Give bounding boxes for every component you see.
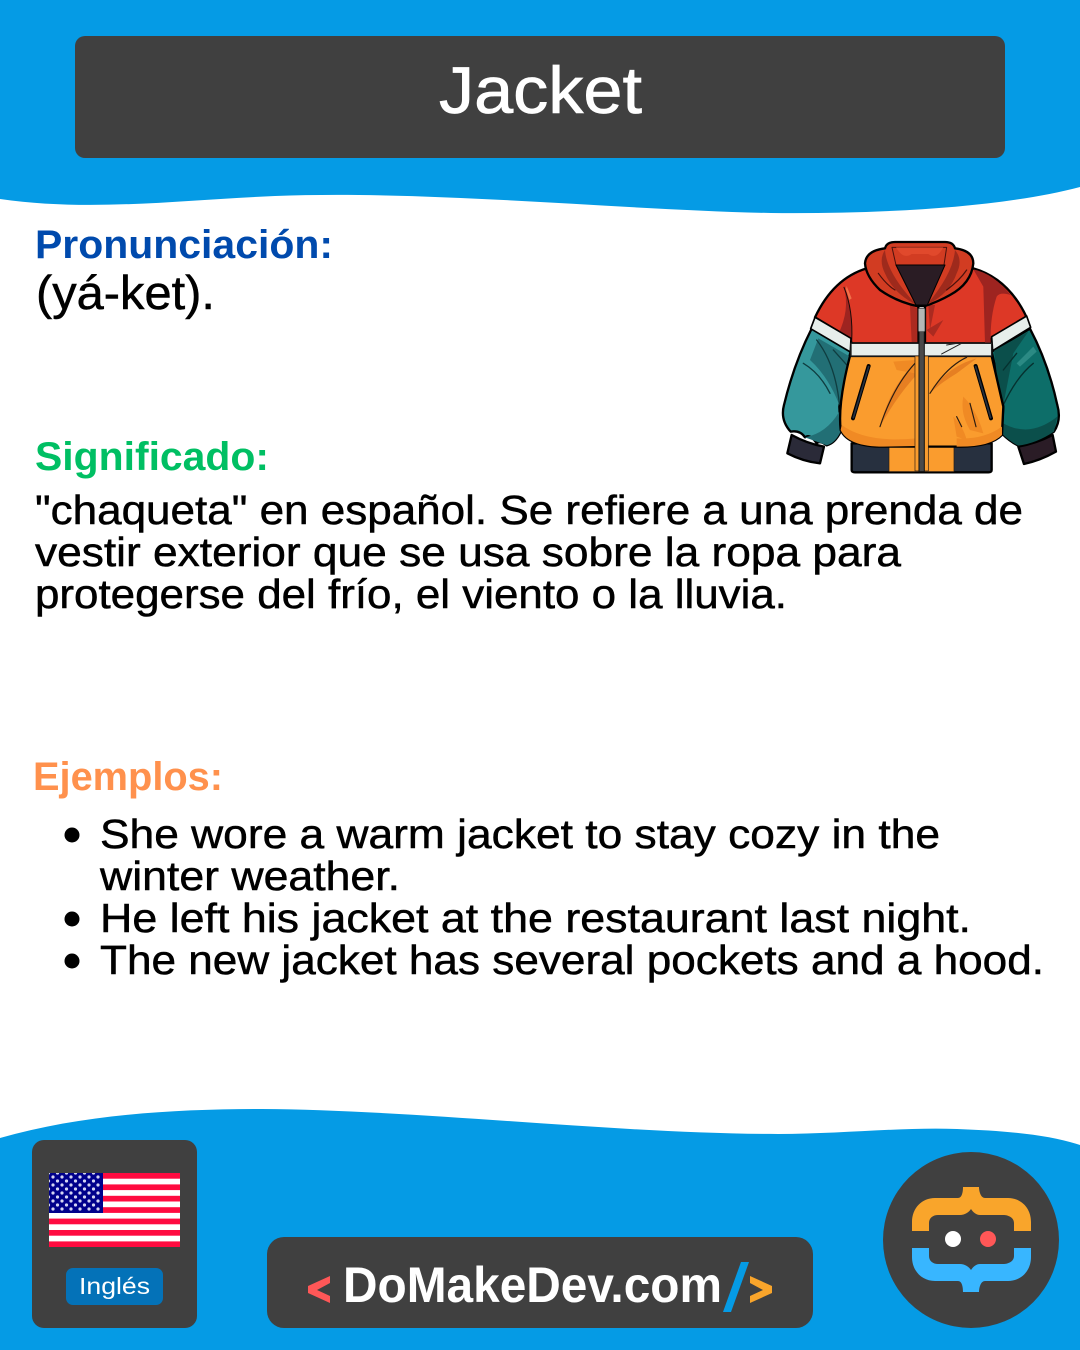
list: examples: The new jacket has several pockets and a hood. — [100, 937, 1044, 983]
hood — [865, 242, 973, 306]
icon: jacket — [783, 242, 1059, 472]
left eye — [945, 1231, 961, 1247]
heading: meaning: Significado: — [35, 435, 269, 479]
right sleeve — [992, 329, 1059, 446]
neck lining — [896, 265, 945, 305]
orange body — [840, 356, 1003, 447]
left cuff — [787, 435, 824, 463]
list: examples: She wore a warm jacket to stay cozy in the — [100, 811, 940, 857]
language badge: Inglés — [79, 1273, 150, 1299]
white bands — [811, 317, 851, 352]
list: examples — [64, 811, 1044, 983]
zipper — [915, 356, 928, 471]
top blue wave band — [0, 0, 1080, 213]
left chevron — [308, 1276, 330, 1303]
bottom brace — [912, 1248, 1031, 1292]
logo: robot badge — [883, 1152, 1059, 1328]
language badge — [66, 1268, 163, 1305]
title panel — [75, 36, 1005, 158]
red yoke — [815, 268, 918, 343]
right chevron — [750, 1276, 772, 1303]
heading: pronunciation: Pronunciación: — [35, 223, 333, 267]
text: meaning: vestir exterior que se usa sobre la ropa para — [35, 529, 901, 575]
title: Jacket — [439, 53, 642, 127]
bottom blue wave band — [0, 1109, 1080, 1350]
list: examples: He left his jacket at the restaurant last night. — [100, 895, 971, 941]
slash — [723, 1262, 749, 1312]
text: meaning — [35, 487, 1023, 617]
website panel — [267, 1237, 813, 1328]
right cuff — [1018, 435, 1056, 464]
right eye — [980, 1231, 996, 1247]
left pocket — [853, 366, 869, 418]
text: meaning: "chaqueta" en español. Se refiere a una prenda de — [35, 487, 1023, 533]
icon: US flag — [49, 1173, 180, 1247]
text: meaning: protegerse del frío, el viento o la lluvia. — [35, 571, 787, 617]
hood inner — [892, 247, 947, 265]
right pocket — [976, 366, 991, 418]
list: examples: winter weather. — [99, 853, 400, 899]
language panel — [32, 1140, 197, 1328]
heading: examples: Ejemplos: — [33, 755, 223, 799]
website name: DoMakeDev.com — [343, 1257, 722, 1313]
top brace — [912, 1187, 1031, 1231]
left sleeve — [783, 329, 851, 445]
text: pronunciation: (yá-ket). — [36, 266, 215, 319]
hem — [852, 443, 992, 472]
